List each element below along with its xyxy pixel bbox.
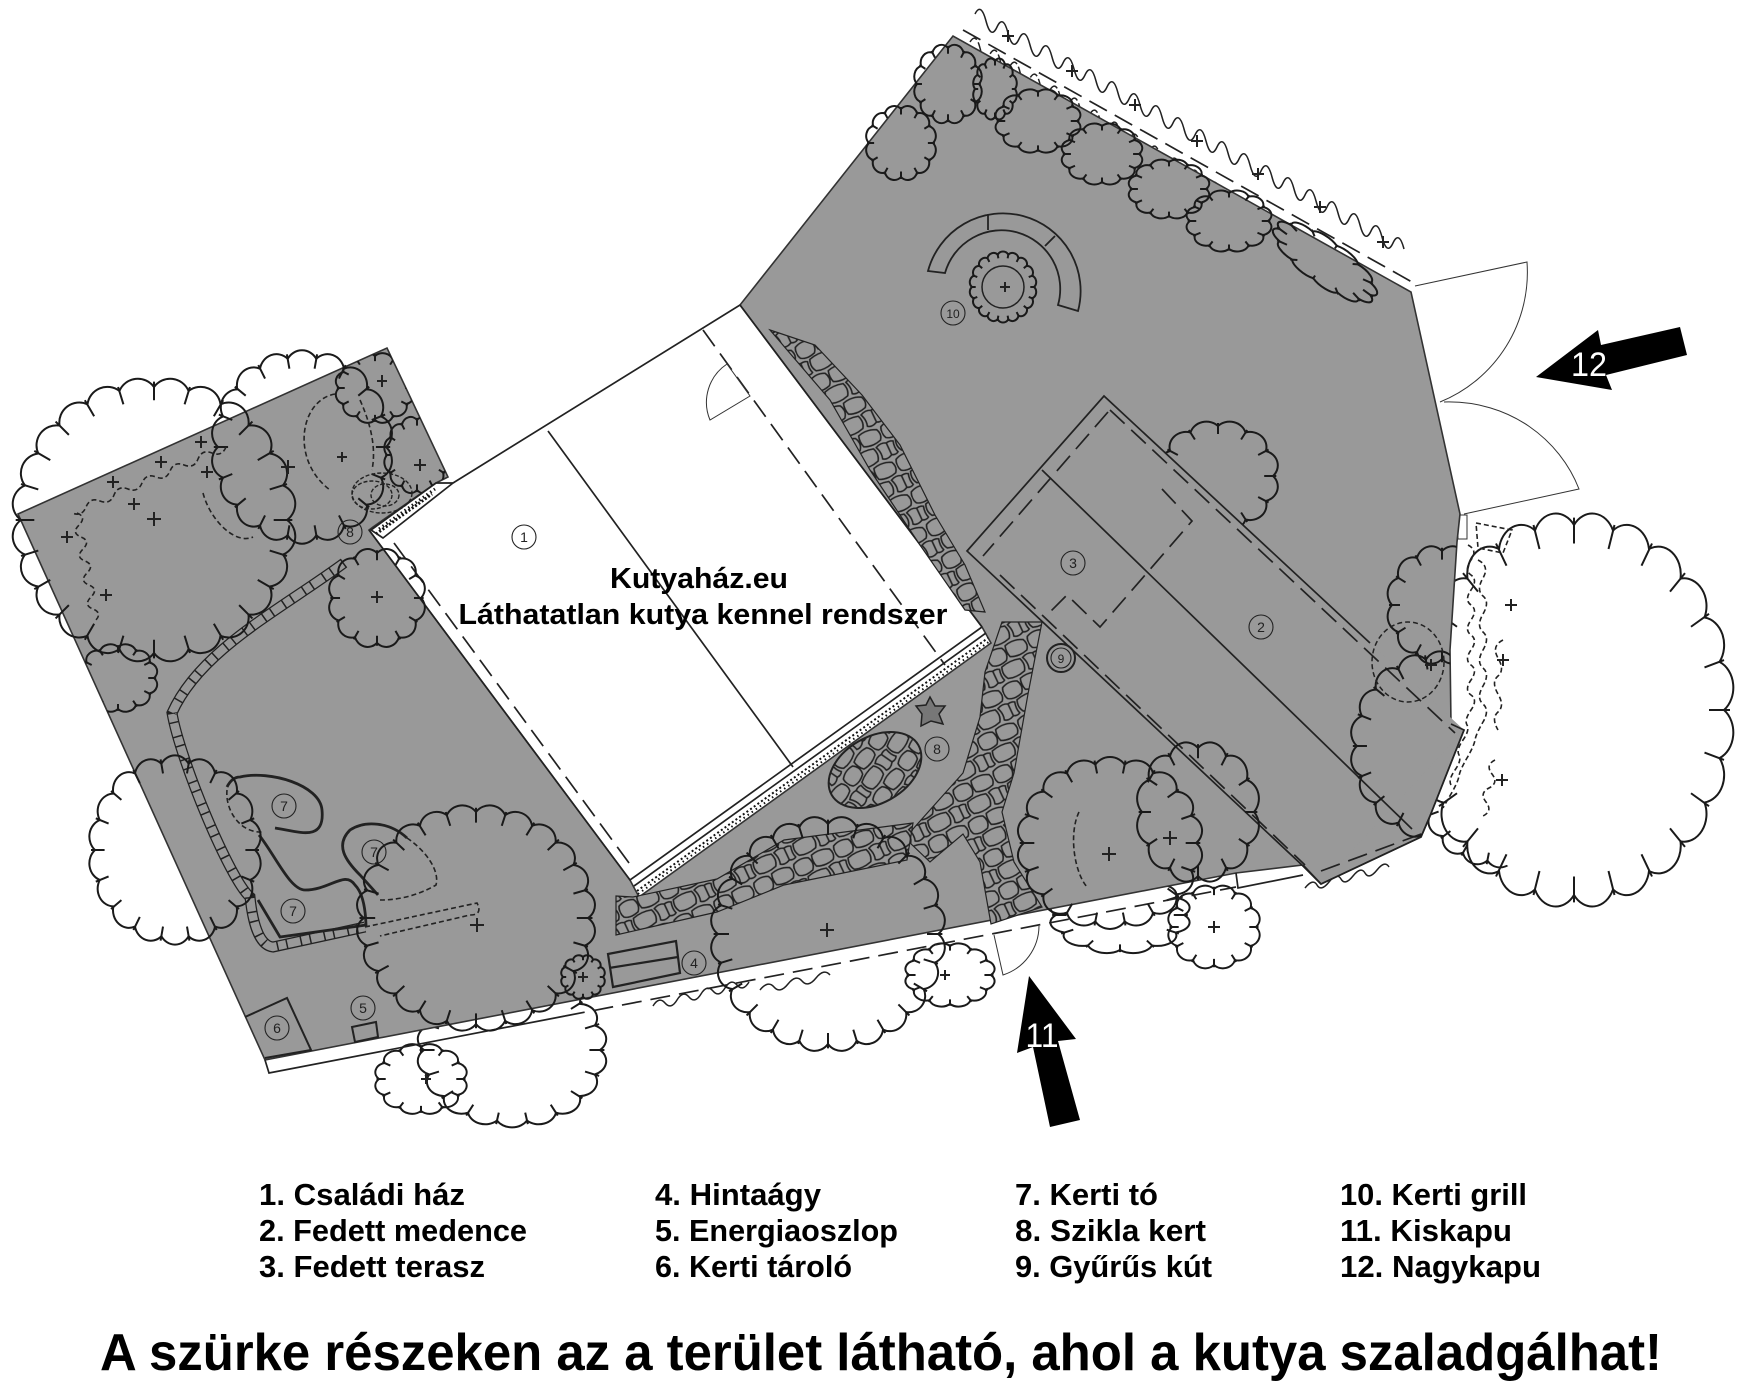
legend column 2 <box>655 1177 898 1284</box>
hedge: right wavy dashed <box>1443 545 1503 816</box>
gate leaves: main gate <box>1415 262 1579 553</box>
numbered marker 7 lower <box>281 899 305 923</box>
legend column 1: 1. Családi ház <box>259 1177 465 1212</box>
numbered marker 3 <box>1061 551 1085 575</box>
numbered marker 3: 3 <box>1069 555 1077 571</box>
numbered marker 8 right <box>925 737 949 761</box>
bush: large top left <box>13 379 295 661</box>
hedge: north east wavy outline <box>975 9 1404 249</box>
legend column 2: 4. Hintaágy <box>655 1177 822 1212</box>
gravel strip along house <box>371 483 990 894</box>
bush: low south <box>1050 877 1190 953</box>
bush: tiny bottom <box>561 955 605 999</box>
house title text: Láthatatlan kutya kennel rendszer <box>458 599 948 631</box>
legend column 1 <box>259 1177 527 1284</box>
numbered marker 5: 5 <box>359 1000 367 1016</box>
garden shed 6 <box>245 998 311 1058</box>
numbered marker 10: 10 <box>946 307 960 321</box>
stone path: south branch <box>616 823 913 935</box>
numbered marker 1 <box>512 525 536 549</box>
numbered marker 7 top <box>272 794 296 818</box>
footer caption: A szürke részeken az a terület látható, ahol a kutya szaladgálhat! <box>100 1324 1662 1382</box>
numbered marker 2: 2 <box>1257 619 1265 635</box>
gate leaf: small gate <box>994 926 1039 975</box>
ponds 7 <box>227 775 437 937</box>
legend column 4: 12. Nagykapu <box>1340 1249 1541 1284</box>
bush: large tree right <box>1415 513 1733 907</box>
bush: large bottom <box>357 805 595 1031</box>
bushes: east clipped to grey <box>1350 545 1457 838</box>
legend column 4: 10. Kerti grill <box>1340 1177 1527 1212</box>
numbered marker 7 middle: 7 <box>370 844 378 860</box>
numbered marker 1: 1 <box>520 529 528 545</box>
legend column 1: 3. Fedett terasz <box>259 1249 485 1284</box>
numbered marker 8 right: 8 <box>933 741 941 757</box>
rock garden 8 <box>815 716 935 824</box>
numbered marker 8 left: 8 <box>346 524 354 540</box>
stepping path dashed to tree <box>365 903 479 936</box>
legend column 4 <box>1340 1177 1541 1284</box>
fence: north east dashed <box>963 30 1412 282</box>
legend column 3: 7. Kerti tó <box>1015 1177 1158 1212</box>
numbered marker 2 <box>1249 615 1273 639</box>
bush: corner clipped <box>79 353 450 712</box>
rock star plant <box>916 697 945 726</box>
bush: south small <box>375 1044 467 1114</box>
numbered marker 7 top: 7 <box>280 798 288 814</box>
arrow 11 small gate <box>1017 976 1080 1127</box>
stone path: central junction <box>907 622 1042 924</box>
fence: south outer line <box>265 873 1303 1073</box>
legend column 4: 11. Kiskapu <box>1340 1213 1512 1248</box>
bush: mid south <box>711 817 945 1051</box>
numbered marker 6: 6 <box>273 1020 281 1036</box>
bush: east of pool <box>1158 422 1278 530</box>
numbered marker 9 well <box>1047 644 1075 672</box>
house title text <box>458 563 948 631</box>
numbered marker 5 <box>351 996 375 1020</box>
numbered marker 4 <box>682 951 706 975</box>
bush: south east small <box>1168 886 1260 968</box>
bush: over pool corner <box>1137 742 1259 882</box>
numbered marker 8 left <box>338 520 362 544</box>
legend column 3: 9. Gyűrűs kút <box>1015 1249 1212 1284</box>
swing bench 4 <box>608 941 680 987</box>
area: dog run grey zone <box>18 36 1464 1060</box>
numbered marker 6 <box>265 1016 289 1040</box>
pool and terrace building <box>967 396 1464 884</box>
hedge: fence scribbles north east <box>970 38 1390 298</box>
bush: small by gate <box>905 943 995 1007</box>
house title text: Kutyaház.eu <box>610 563 788 595</box>
legend column 2: 5. Energiaoszlop <box>655 1213 898 1248</box>
hedge: south wavy outlines <box>653 864 1389 1006</box>
legend column 3: 8. Szikla kert <box>1015 1213 1206 1248</box>
dashed inner canopy lines <box>203 394 1088 888</box>
grill 10 with stone ring <box>928 213 1081 322</box>
stone path: north along house <box>770 330 985 612</box>
numbered marker 4: 4 <box>690 955 698 971</box>
rock scribble near house corner <box>352 473 412 513</box>
numbered marker 9 well: 9 <box>1058 652 1065 666</box>
bushes inside the grey area <box>13 45 1529 1051</box>
legend column 3 <box>1015 1177 1212 1284</box>
mask: right tree interior <box>1432 534 1716 886</box>
hedge bushes: north east row <box>866 45 1387 315</box>
bush: lower west <box>89 755 261 945</box>
bushes outside the fence <box>375 513 1733 1127</box>
legend column 1: 2. Fedett medence <box>259 1213 527 1248</box>
bush: north west <box>212 350 392 544</box>
arrow 11 small gate: 11 <box>1026 1017 1058 1055</box>
bush: south white tree <box>418 973 606 1127</box>
arrow 12 main gate: 12 <box>1571 346 1607 384</box>
bush: by gate east <box>1018 757 1202 929</box>
numbered marker 7 lower: 7 <box>289 903 297 919</box>
bush: lower left lobe of right tree <box>1421 713 1579 867</box>
thin stone path: left garden <box>172 563 365 947</box>
hedge: left wavy dashed <box>72 447 226 621</box>
energy pillar 5 <box>352 1022 378 1042</box>
numbered marker 7 middle <box>362 840 386 864</box>
arrow 12 main gate <box>1536 327 1687 390</box>
house outline: building 1 <box>369 305 982 880</box>
numbered marker 10 <box>941 301 965 325</box>
legend column 2: 6. Kerti tároló <box>655 1249 852 1284</box>
plant centre crosses <box>61 30 1517 1084</box>
bush: by house corner <box>329 549 425 647</box>
